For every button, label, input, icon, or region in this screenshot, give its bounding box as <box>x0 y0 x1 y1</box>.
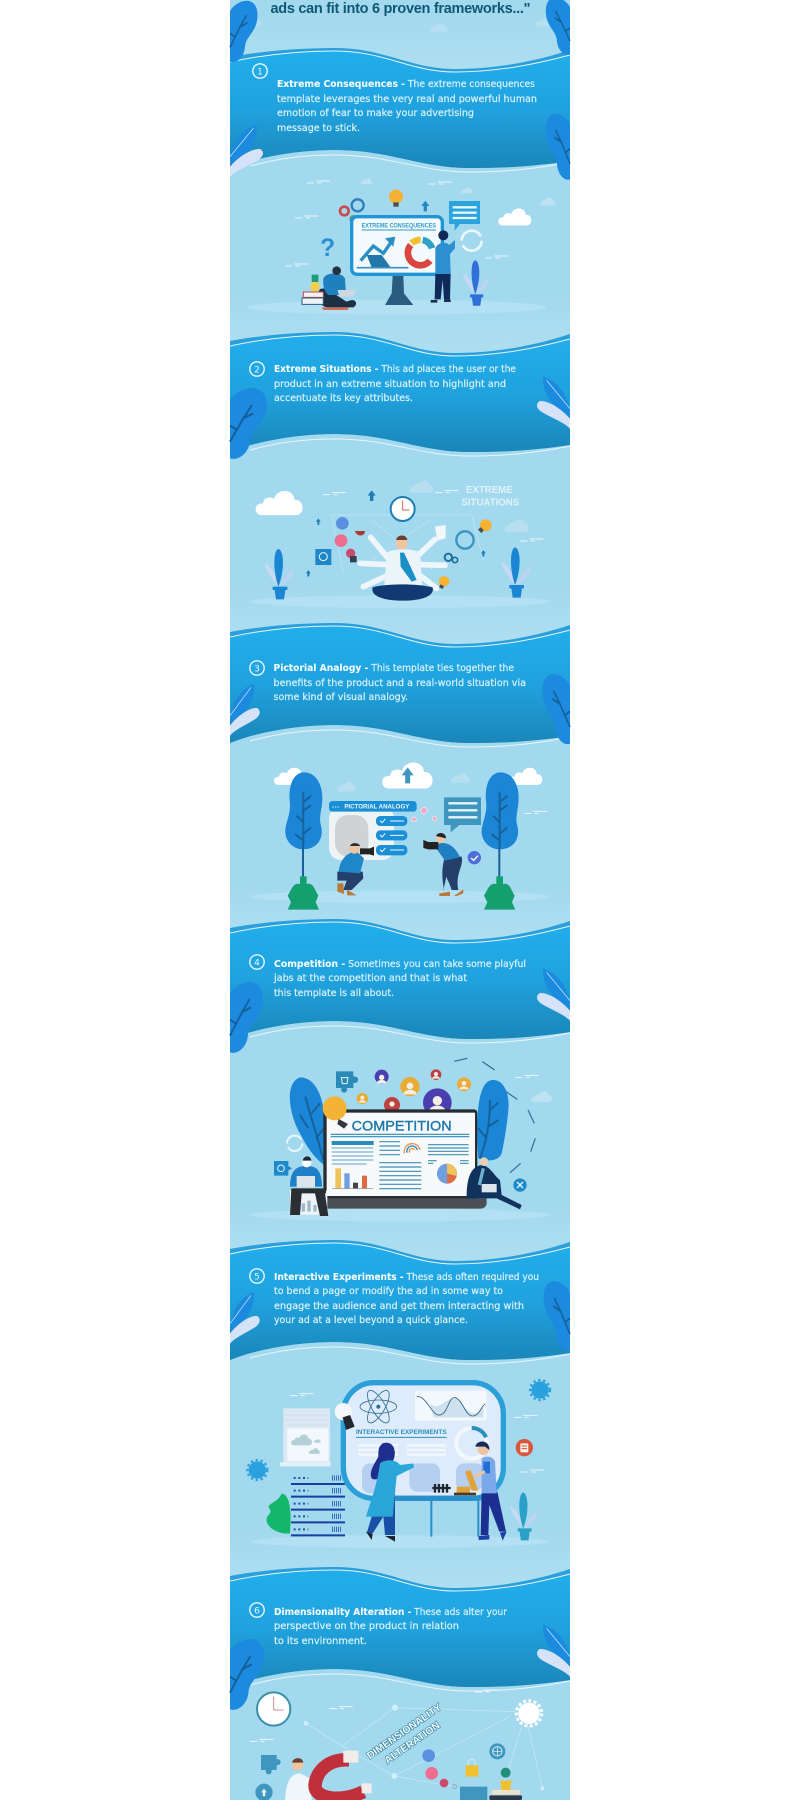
clock <box>257 1692 290 1726</box>
number badge 4 <box>250 955 264 969</box>
arrow badge <box>255 1784 273 1800</box>
leaf: section 1 right <box>546 114 570 180</box>
text block 5: your ad at a level beyond a quick glance. <box>274 1315 468 1326</box>
text lines <box>358 1445 446 1455</box>
man with magnet <box>285 1758 312 1800</box>
header <box>249 1 550 32</box>
number badge 4: 4 <box>254 958 260 968</box>
meditating man <box>360 535 445 601</box>
number badge 6 <box>250 1603 264 1617</box>
leaves: section 6 right <box>537 1625 570 1677</box>
wave band 3 <box>230 588 570 747</box>
tools badge <box>513 1178 527 1192</box>
speech bubble <box>449 201 480 231</box>
card banner: PICTORIAL ANALOGY <box>344 804 410 811</box>
text block 5 <box>250 1269 539 1326</box>
lightbulb <box>389 190 403 207</box>
wave band 6 <box>230 1532 570 1691</box>
text block 5: to bend a page or modify the ad in some way to <box>274 1286 503 1297</box>
clouds <box>256 481 529 532</box>
speed dashes <box>323 491 543 541</box>
clouds <box>361 178 555 225</box>
white gear <box>516 1701 542 1726</box>
number badge 6: 6 <box>254 1606 260 1616</box>
text block 5: Interactive Experiments - These ads often required you <box>274 1272 539 1283</box>
gears <box>340 199 364 222</box>
books and cactus <box>489 1768 522 1800</box>
illustration 4: competition <box>250 1058 552 1221</box>
network nodes <box>304 1705 544 1790</box>
donut rings <box>404 1144 420 1153</box>
laptop on desk <box>367 255 391 267</box>
monitor <box>352 217 442 305</box>
social icons <box>315 517 357 565</box>
text block 1: emotion of fear to make your advertising <box>277 108 474 119</box>
leaf: section 5 right <box>544 1281 570 1351</box>
title: ads can fit into 6 proven frameworks..." <box>270 1 530 17</box>
atom icon <box>360 1387 397 1426</box>
text block 6: Dimensionality Alteration - These ads alter your <box>274 1607 508 1618</box>
leaf: section 2 left <box>230 388 267 459</box>
number badge 5: 5 <box>254 1272 260 1282</box>
padlock <box>466 1759 478 1777</box>
puzzle icon <box>261 1755 281 1774</box>
text block 3 <box>250 661 526 703</box>
wave band 4 <box>230 884 570 1043</box>
social icons <box>422 1749 457 1789</box>
plants <box>265 547 531 599</box>
globe badge <box>489 1743 505 1759</box>
speed dashes <box>524 811 547 813</box>
sitting person <box>318 266 357 310</box>
speech bubble <box>444 797 481 832</box>
magnet <box>315 1757 372 1798</box>
wave band 5 <box>230 1205 570 1364</box>
gears <box>247 1380 550 1480</box>
ring gauge <box>456 1428 487 1459</box>
microscope <box>454 1470 478 1495</box>
trees <box>285 772 519 910</box>
test tube rack <box>432 1484 451 1493</box>
center text <box>379 1142 421 1189</box>
ground <box>250 890 550 903</box>
sync icon <box>287 1136 302 1151</box>
text block 5: engage the audience and get them interacting with <box>274 1301 524 1312</box>
network lines <box>306 1708 542 1797</box>
leaf: section 4 left <box>230 982 263 1053</box>
page background column <box>230 0 570 1800</box>
leaves: section 3 left <box>230 684 260 736</box>
speed dashes <box>250 1690 498 1741</box>
number badge 1 <box>253 64 267 78</box>
lab table <box>393 1496 481 1537</box>
leaves: section 5 left <box>230 1292 260 1344</box>
text block 6: to its environment. <box>274 1636 367 1647</box>
arrows <box>306 490 486 577</box>
number badge 3 <box>250 661 264 675</box>
lightbulb <box>323 1096 348 1129</box>
board title: INTERACTIVE EXPERIMENTS <box>356 1429 447 1436</box>
user avatars <box>357 1069 471 1117</box>
arrow <box>421 201 429 211</box>
notes badge <box>516 1439 533 1456</box>
leaves: section 1 left <box>230 125 263 177</box>
speed dashes <box>290 1394 544 1472</box>
text block 6: perspective on the product in relation <box>274 1621 459 1632</box>
header clouds <box>249 19 550 32</box>
number badge 2 <box>250 362 264 376</box>
experiments board <box>343 1383 503 1498</box>
left column <box>332 1141 374 1164</box>
illustration 5: interactive experiments <box>247 1380 550 1548</box>
text block 3: Pictorial Analogy - This template ties together the <box>274 663 514 674</box>
illustration title: EXTREME <box>466 485 513 496</box>
illustration 6: dimensionality alteration <box>250 1690 544 1800</box>
text block 3: some kind of visual analogy. <box>274 692 408 703</box>
text block 6 <box>250 1603 508 1647</box>
illustration 2: extreme situations <box>250 481 550 608</box>
potted plant <box>463 260 489 306</box>
illustration title: SITUATIONS <box>461 497 520 508</box>
illustration 1: extreme consequences <box>247 178 555 315</box>
text block 4: this template is all about. <box>274 988 394 999</box>
bulb <box>335 1403 355 1430</box>
laptop <box>323 1109 487 1209</box>
text block 1 <box>253 64 537 134</box>
number badge 2: 2 <box>254 366 260 376</box>
text block 2: product in an extreme situation to highlight and <box>274 379 506 390</box>
items in hands <box>355 517 494 590</box>
green leaf <box>267 1493 291 1534</box>
leaf: header top right <box>546 0 570 55</box>
right text <box>428 1145 469 1163</box>
ground <box>250 595 550 608</box>
books and pineapple <box>302 275 323 304</box>
leaf: section 6 left <box>230 1639 264 1710</box>
wave band 2 <box>230 297 570 456</box>
illustration title: ALTERATION <box>383 1720 442 1766</box>
number badge 1: 1 <box>257 68 263 78</box>
number badge 5 <box>250 1269 264 1283</box>
ground <box>252 1535 548 1548</box>
wave band 1 <box>230 13 570 172</box>
monitor title: EXTREME CONSEQUENCES <box>362 222 436 229</box>
male scientist <box>475 1442 507 1541</box>
sync icon <box>462 231 482 251</box>
seated person left <box>290 1156 328 1216</box>
chart arrow <box>361 240 393 261</box>
text block 1: template leverages the very real and powerful human <box>277 94 537 105</box>
text block 2 <box>250 362 516 404</box>
text block 2: Extreme Situations - This ad places the user or the <box>274 364 516 375</box>
speed dashes and cloud <box>515 1075 552 1102</box>
analogy card <box>329 801 417 860</box>
ground <box>250 1209 550 1221</box>
clouds <box>274 768 542 791</box>
window card <box>280 1408 331 1466</box>
number badge 3: 3 <box>254 664 260 674</box>
dashed orbit <box>454 1058 535 1173</box>
illustration title <box>461 485 520 508</box>
server rack <box>291 1478 345 1535</box>
check chips <box>376 816 407 855</box>
standing person <box>431 230 455 303</box>
potted plant <box>510 1493 538 1540</box>
leaves <box>290 1077 509 1165</box>
woman scientist <box>366 1443 414 1542</box>
illustration 3: pictorial analogy <box>250 763 550 910</box>
laptop <box>460 1787 487 1800</box>
leaves: section 4 right <box>537 969 570 1021</box>
wave chart <box>415 1391 487 1421</box>
standing photographer <box>423 833 463 896</box>
illustration title: DIMENSIONALITY <box>365 1702 444 1762</box>
text block 1: Extreme Consequences - The extreme consequences <box>277 79 535 90</box>
pink dots <box>412 807 437 822</box>
text block 2: accentuate its key attributes. <box>274 393 413 404</box>
check badge <box>468 851 481 864</box>
text block 3: benefits of the product and a real-world situation via <box>274 678 526 689</box>
upload cloud <box>382 763 433 788</box>
crouching photographer <box>337 843 374 895</box>
text block 4: jabs at the competition and that is what <box>273 973 467 984</box>
soft tiles <box>362 1463 484 1493</box>
leaves: section 2 right <box>537 377 570 429</box>
donut chart <box>408 240 432 265</box>
question mark: ? <box>320 235 335 262</box>
bar chart <box>332 1168 373 1189</box>
text block 1: message to stick. <box>277 123 360 134</box>
laptop title: COMPETITION <box>352 1117 452 1133</box>
seated person right <box>467 1157 522 1209</box>
leaf: section 3 right <box>542 674 570 744</box>
ground <box>247 300 547 315</box>
pie chart <box>437 1164 457 1184</box>
text block 4 <box>250 955 526 999</box>
puzzle icon <box>336 1071 358 1093</box>
leaf: header top left <box>230 1 258 62</box>
speed dashes <box>285 181 508 266</box>
text block 4: Competition - Sometimes you can take some playful <box>274 959 526 970</box>
network lines <box>332 515 483 573</box>
timer box <box>274 1161 292 1176</box>
clock <box>391 497 415 521</box>
